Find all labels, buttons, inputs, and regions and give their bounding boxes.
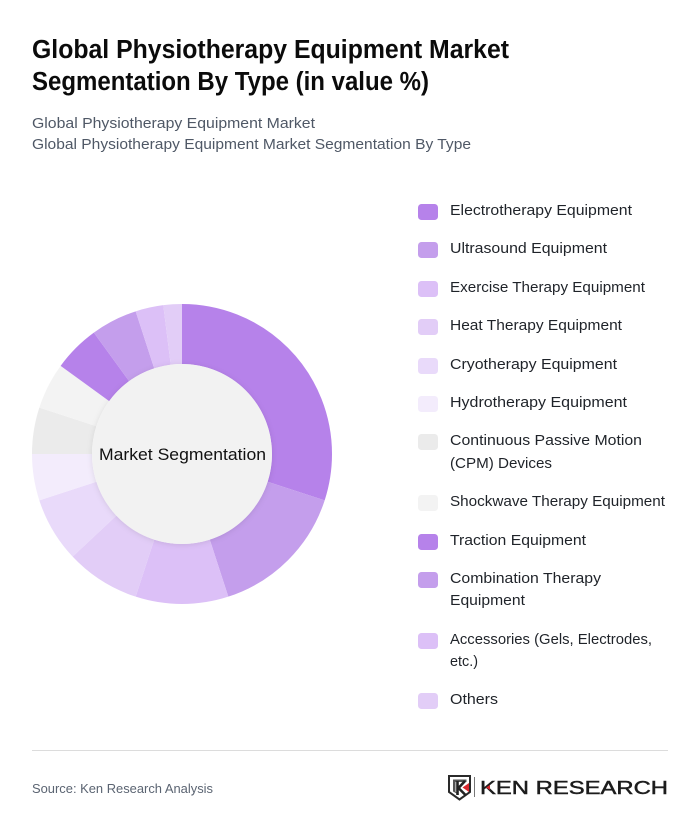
slice: Shockwave Therapy Equipment xyxy=(62,334,302,574)
title: Segmentation By Type (in value %) xyxy=(32,68,429,96)
donut centre xyxy=(92,364,272,544)
slice: Traction Equipment xyxy=(62,334,302,574)
slice: Electrotherapy Equipment xyxy=(62,334,302,574)
legend item: Accessories xyxy=(418,631,652,670)
legend item: Cryotherapy Equipment: Cryotherapy Equipment xyxy=(450,356,618,373)
slice: Heat Therapy Equipment xyxy=(62,334,302,574)
legend item: Hydrotherapy Equipment: Hydrotherapy Equipment xyxy=(450,394,628,411)
legend item: Shockwave Therapy Equipment: Shockwave Therapy Equipment xyxy=(450,493,666,510)
legend item: Others: Others xyxy=(450,691,498,708)
logo wordmark: KEN RESEARCH xyxy=(480,778,668,798)
legend item: Continuous Passive Motion (CPM) Devices xyxy=(418,432,642,472)
title xyxy=(32,36,509,96)
legend item: Exercise Therapy Equipment: Exercise Therapy Equipment xyxy=(450,279,646,296)
centre label: Market Segmentation xyxy=(99,445,266,464)
title: Global Physiotherapy Equipment Market xyxy=(32,36,509,64)
slice: Others xyxy=(62,334,302,574)
legend item: Continuous Passive Motion (CPM) Devices: Continuous Passive Motion xyxy=(450,432,642,449)
legend xyxy=(418,202,666,709)
legend item: Others xyxy=(418,691,498,709)
legend item: Heat Therapy Equipment: Heat Therapy Equipment xyxy=(450,317,623,334)
subtitle: Global Physiotherapy Equipment Market Segmentation By Type xyxy=(32,136,471,153)
logo accent: red notch xyxy=(486,785,490,790)
legend item: Continuous Passive Motion (CPM) Devices: (CPM) Devices xyxy=(450,455,552,472)
slice: Accessories xyxy=(62,334,302,574)
legend item: Combination Therapy Equipment: Equipment xyxy=(450,592,526,609)
legend item: Combination Therapy Equipment xyxy=(418,570,602,609)
legend item: Combination Therapy Equipment: Combination Therapy xyxy=(450,570,602,587)
source note: Source: Ken Research Analysis xyxy=(32,781,213,796)
legend item: Ultrasound Equipment: Ultrasound Equipment xyxy=(450,240,608,257)
legend item: Traction Equipment: Traction Equipment xyxy=(450,532,587,549)
subtitle: Global Physiotherapy Equipment Market xyxy=(32,115,316,132)
slice: Cryotherapy Equipment xyxy=(62,334,302,574)
legend item: Electrotherapy Equipment: Electrotherapy Equipment xyxy=(450,202,633,219)
subtitle xyxy=(32,115,471,153)
slice: Exercise Therapy Equipment xyxy=(62,334,302,574)
legend item: Accessories: Accessories (Gels, Electrodes, xyxy=(450,631,652,648)
slice: Combination Therapy Equipment xyxy=(62,334,302,574)
slice: Ultrasound Equipment xyxy=(62,334,302,574)
legend item: Accessories: etc.) xyxy=(450,653,478,670)
donut chart xyxy=(62,334,302,574)
icon: shield xyxy=(449,776,470,800)
slice: Hydrotherapy Equipment xyxy=(62,334,302,574)
slice: CPM Devices xyxy=(62,334,302,574)
logo: Ken Research xyxy=(449,776,668,800)
